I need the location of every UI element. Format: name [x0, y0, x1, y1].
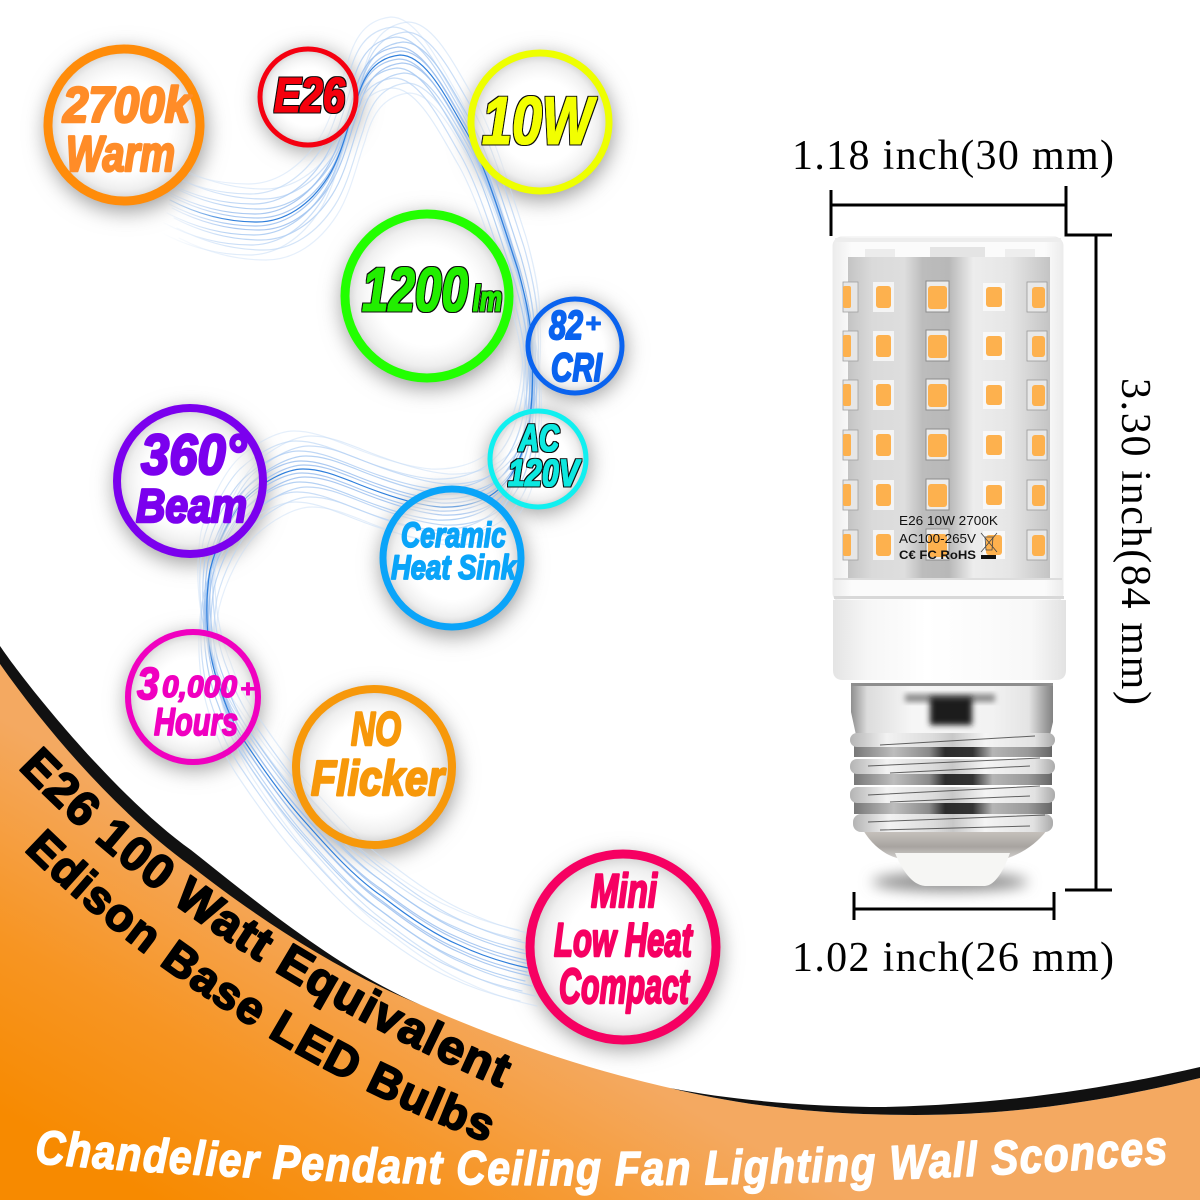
badge: 30,000+ Hours: Hours: [154, 701, 238, 744]
badge: Ceramic Heat Sink: Ceramic: [401, 516, 506, 555]
badge: 30,000+ Hours: 0,000: [162, 669, 237, 704]
badge: 10W: [471, 53, 609, 191]
caption: applications: Chandelier Pendant Ceiling Fan Lighting Wall Sconces: [36, 1130, 1166, 1196]
badge: 360 Beam: [117, 408, 263, 554]
printed bulb label: [899, 513, 998, 562]
badge: 2700k Warm: [48, 49, 200, 201]
bottom orange band: [0, 646, 1200, 1200]
badge: NO Flicker: [296, 689, 452, 845]
badge: AC 120V: 120V: [508, 453, 581, 495]
dimension: height 3.30 inch: [1065, 186, 1158, 890]
badge: NO Flicker: Flicker: [311, 752, 446, 806]
bulb photo: [833, 237, 1066, 891]
printed bulb label: C€ FC RoHS: [899, 548, 976, 562]
floor shadow under the bulb: [872, 873, 1028, 891]
badge: 82+ CRI: [528, 299, 622, 393]
badge: E26: E26: [274, 69, 346, 123]
badge: 82+ CRI: CRI: [551, 346, 603, 390]
badge: 1200lm: 1200: [362, 256, 468, 325]
badge: AC 120V: [490, 411, 586, 507]
dimension: width 1.18 inch: [792, 133, 1114, 236]
badge: 30,000+ Hours: +: [240, 676, 255, 703]
badge: 30,000+ Hours: [128, 632, 258, 762]
translucent lamp shell: [833, 237, 1064, 602]
printed bulb label: E26 10W 2700K: [899, 513, 998, 528]
heading: E26 100 Watt Equivalent: E26 100 Watt Equivalent: [19, 746, 512, 1088]
circle shadows and white discs: [44, 45, 720, 1049]
printed bulb label: AC100-265V: [899, 531, 976, 546]
badge: 360 Beam: 360°: [141, 423, 247, 487]
badge: NO Flicker: NO: [351, 702, 401, 755]
white collar: [833, 600, 1066, 680]
badge: Mini Low Heat Compact: Mini: [591, 864, 658, 917]
heading: Edison Base LED Bulbs: Edison Base LED Bulbs: [24, 828, 492, 1140]
badge: 1200lm: lm: [473, 278, 502, 319]
badge: 1200lm: [345, 214, 509, 378]
badge: 360 Beam: Beam: [136, 479, 247, 532]
badge: 82+ CRI: +: [585, 308, 601, 338]
dimension: base 1.02 inch: 1.02 inch(26 mm): [792, 935, 1114, 981]
badge: Mini Low Heat Compact: [530, 854, 716, 1040]
badge: 30,000+ Hours: 3: [137, 658, 159, 709]
badge: 2700k Warm: Warm: [66, 126, 175, 182]
dimension: base 1.02 inch: [792, 892, 1114, 981]
badge: Ceramic Heat Sink: [383, 489, 521, 627]
badge: Mini Low Heat Compact: Compact: [559, 960, 690, 1014]
badge: E26: [260, 49, 356, 145]
blue light swoosh ribbon: [161, 17, 542, 1006]
badge: 2700k Warm: 2700k: [62, 77, 192, 133]
dimension: height 3.30 inch: 3.30 inch(84 mm): [1112, 378, 1158, 705]
dimension: width 1.18 inch: 1.18 inch(30 mm): [792, 133, 1114, 179]
screw base: [850, 683, 1055, 886]
badge: AC 120V: AC: [518, 418, 559, 460]
badge: 10W: 10W: [482, 83, 598, 159]
badge: Mini Low Heat Compact: Low Heat: [554, 913, 694, 966]
badge: Ceramic Heat Sink: Heat Sink: [391, 549, 518, 587]
LED chips grid: [843, 281, 1047, 560]
badge: 82+ CRI: 82: [549, 302, 583, 348]
